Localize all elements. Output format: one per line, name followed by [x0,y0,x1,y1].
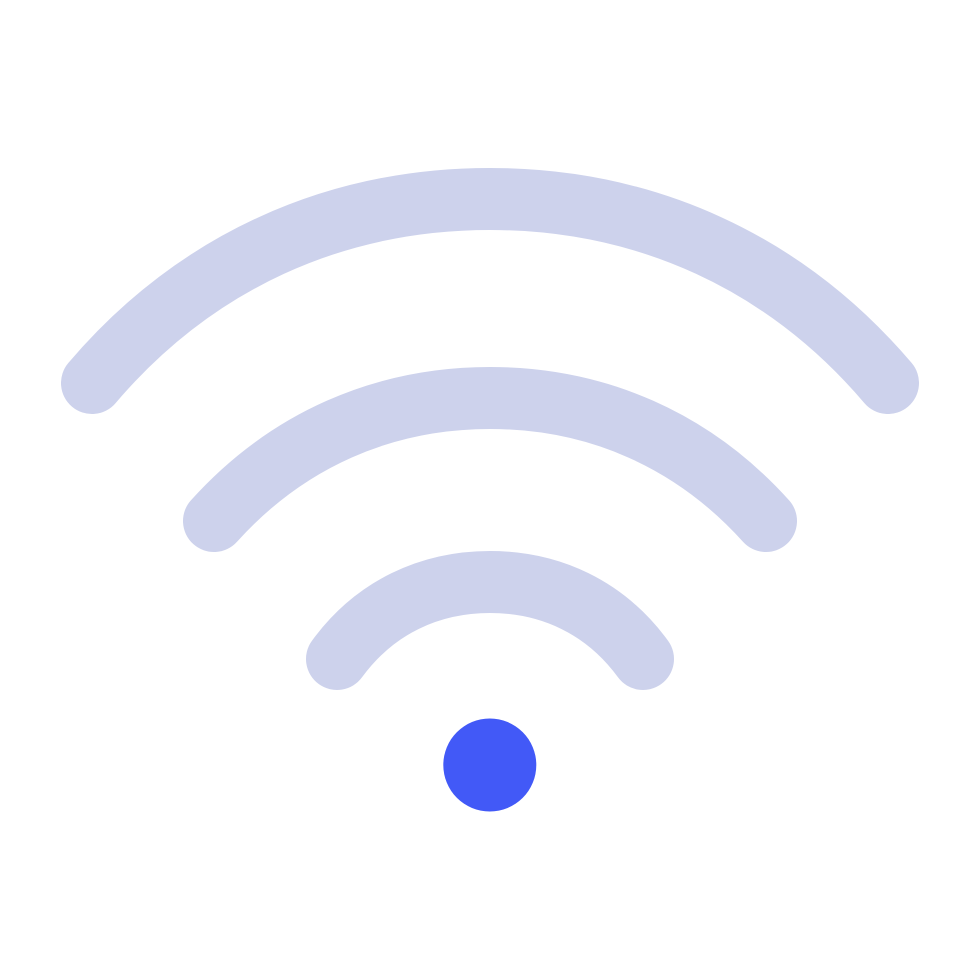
inner wifi arc [337,582,643,659]
middle wifi arc [214,398,766,521]
blue signal dot [443,718,536,812]
outer wifi arc [92,199,888,383]
